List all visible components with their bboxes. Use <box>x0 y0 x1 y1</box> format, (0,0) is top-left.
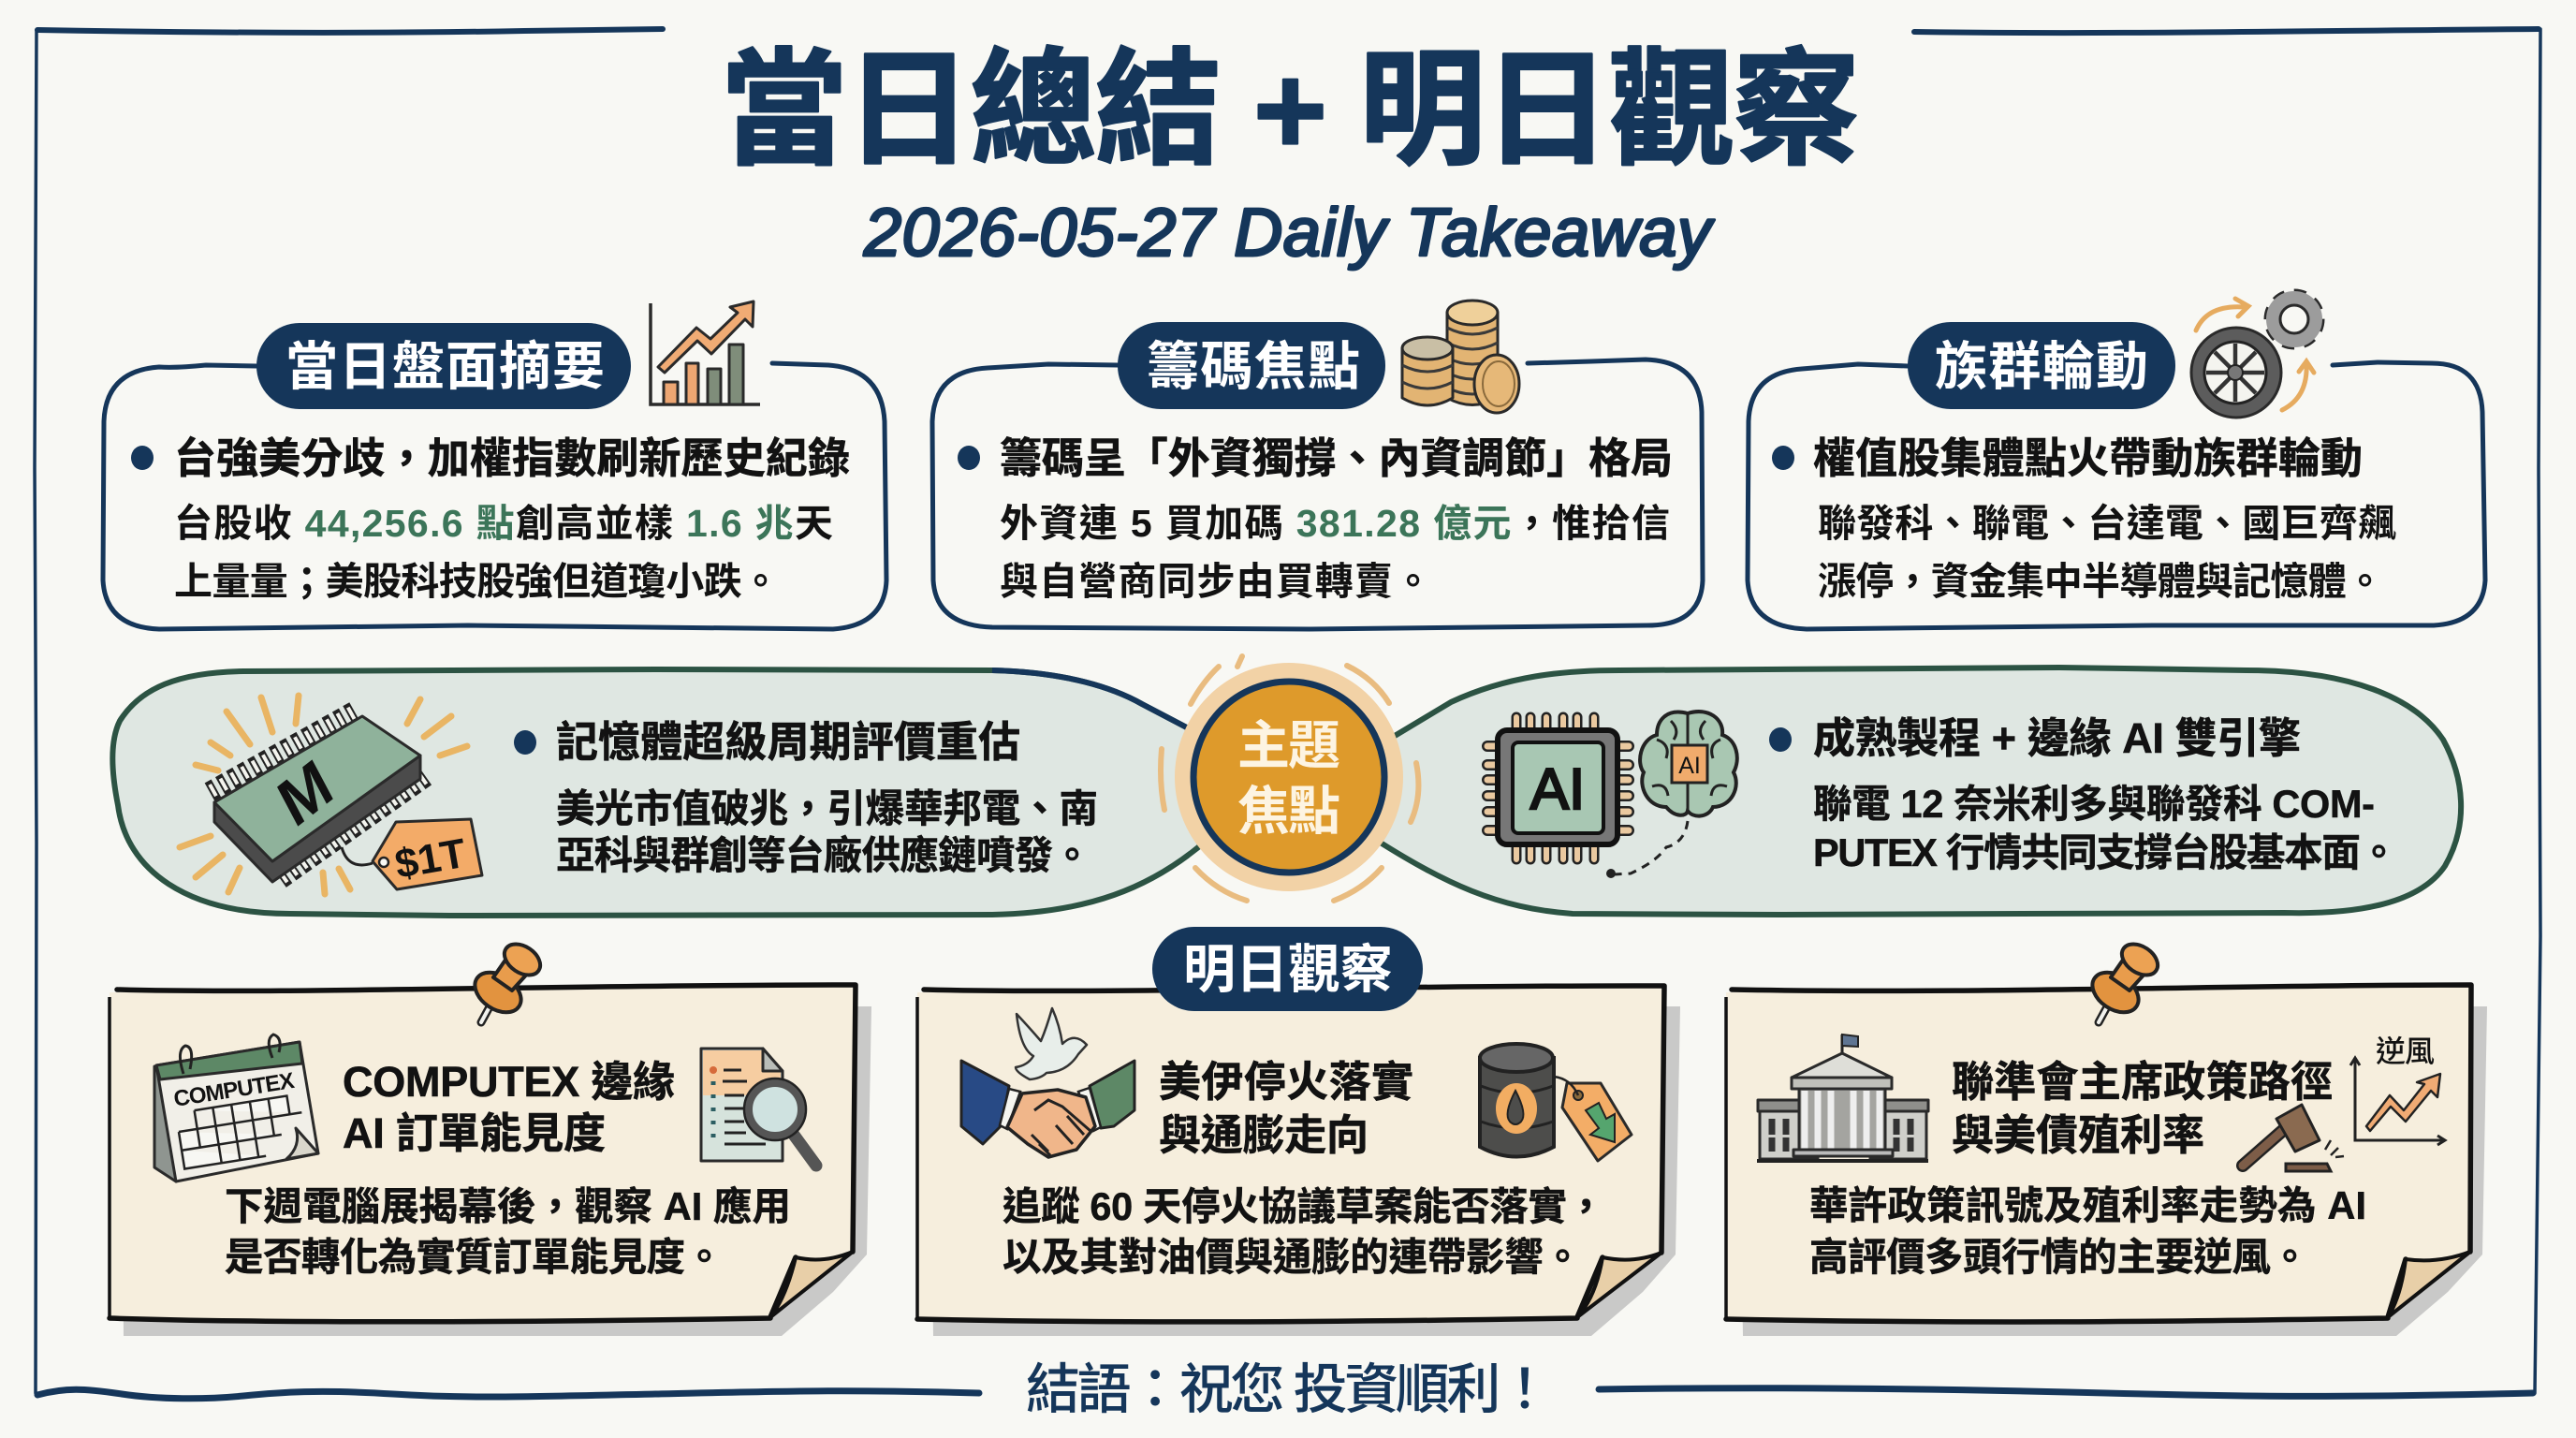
icon: computex calendar: COMPUTEX <box>172 1068 296 1112</box>
note heading <box>343 1058 675 1157</box>
note body <box>225 1184 791 1279</box>
icon: push pin <box>468 938 546 1022</box>
chips body text: 外資連 5 買加碼 381.28 億元，惟拾信 <box>1000 502 1670 545</box>
sector body text: 漲停，資金集中半導體與記憶體。 <box>1818 560 2384 603</box>
chips heading text: 籌碼呈「外資獨撐、內資調節」格局 <box>1000 434 1673 482</box>
heading pill: 籌碼焦點 <box>1147 337 1360 396</box>
icon: dove over handshake <box>961 1008 1134 1157</box>
heading pill <box>1908 322 2175 409</box>
bullet dot <box>514 730 536 755</box>
note body <box>1003 1184 1605 1279</box>
icon: memory chip with price tag: $1T <box>391 830 470 888</box>
memory body text: 亞科與群創等台廠供應鏈噴發。 <box>556 833 1091 877</box>
chips body text: 與自營商同步由買轉賣。 <box>1000 560 1432 603</box>
icon: coin stacks <box>1402 301 1519 413</box>
icon: AI chip <box>1487 717 1629 859</box>
chips body text <box>1000 502 1670 603</box>
icon: AI chip: AI <box>1530 757 1585 822</box>
panel: dual engine band <box>1368 668 2461 915</box>
tomorrow watch pill <box>1152 927 1423 1011</box>
heading pill <box>1118 322 1385 409</box>
note heading: 與通膨走向 <box>1159 1111 1368 1159</box>
dual engine body text: PUTEX 行情共同支撐台股基本面。 <box>1813 830 2398 874</box>
note heading <box>1952 1058 2333 1159</box>
note heading: 美伊停火落實 <box>1159 1058 1413 1106</box>
note heading: 聯準會主席政策路徑 <box>1952 1058 2333 1106</box>
summary heading text: 台強美分歧，加權指數刷新歷史紀錄 <box>174 434 850 482</box>
icon: memory chip with price tag <box>180 696 482 894</box>
panel: sector rotation <box>1748 298 2485 629</box>
note body: 追蹤 60 天停火協議草案能否落實， <box>1003 1184 1605 1228</box>
note: ceasefire <box>917 927 1680 1336</box>
memory body text: 美光市值破兆，引爆華邦電、南 <box>556 786 1098 830</box>
summary body text <box>174 502 833 603</box>
central badge: theme focus: 焦點 <box>1237 782 1340 841</box>
icon: wheel and gear with arrows <box>2191 298 2316 418</box>
note heading: 與美債殖利率 <box>1952 1111 2204 1159</box>
icon: computex calendar <box>154 1034 318 1181</box>
dual engine body text <box>1813 782 2398 874</box>
note body: 是否轉化為實質訂單能見度。 <box>225 1235 724 1279</box>
sector body text <box>1818 502 2396 603</box>
note heading <box>1159 1058 1413 1159</box>
subtitle: 2026-05-27 Daily Takeaway <box>863 196 1715 271</box>
icon: memory chip with price tag: M <box>267 744 343 842</box>
heading pill <box>256 323 631 409</box>
bullet dot <box>958 446 980 470</box>
note body: 高評價多頭行情的主要逆風。 <box>1809 1235 2309 1279</box>
central badge: theme focus: 主題 <box>1237 716 1340 775</box>
heading pill: 族群輪動 <box>1935 337 2148 396</box>
icon: brain with AI: AI <box>1678 753 1701 779</box>
icon: rising bar chart <box>651 301 760 404</box>
closing message: 結語：祝您 投資順利！ <box>1026 1359 1552 1420</box>
title: 當日總結 + 明日觀察 <box>721 39 1860 181</box>
icon: federal reserve building <box>1757 1034 1928 1161</box>
bullet dot <box>131 446 154 470</box>
dual engine body text: 聯電 12 奈米利多與聯發科 COM- <box>1813 782 2375 826</box>
note body: 下週電腦展揭幕後，觀察 AI 應用 <box>225 1184 791 1228</box>
icon: brain with AI <box>1606 712 1737 878</box>
memory body text <box>556 786 1098 877</box>
bullet dot <box>1772 446 1794 470</box>
summary body text: 台股收 44,256.6 點創高並樣 1.6 兆天 <box>174 502 833 545</box>
icon: document with magnifier <box>701 1049 816 1166</box>
tomorrow watch pill: 明日觀察 <box>1183 940 1393 999</box>
note heading: AI 訂單能見度 <box>343 1109 606 1157</box>
icon: headwind chart: 逆風 <box>2376 1034 2435 1068</box>
summary body text: 上量量；美股科技股強但道瓊小跌。 <box>174 560 780 603</box>
dual engine heading text: 成熟製程 + 邊緣 AI 雙引擎 <box>1813 714 2301 762</box>
sector heading text: 權值股集體點火帶動族群輪動 <box>1813 434 2363 482</box>
bullet dot <box>1769 727 1792 752</box>
icon: gavel <box>2243 1105 2344 1171</box>
icon: push pin <box>2086 938 2163 1022</box>
note body <box>1809 1183 2366 1279</box>
panel: chips focus <box>932 301 1703 629</box>
panel: memory band <box>112 669 1209 916</box>
sector body text: 聯發科、聯電、台達電、國巨齊飆 <box>1818 502 2396 545</box>
note: fed policy <box>1726 938 2487 1336</box>
panel: market summary <box>103 301 886 629</box>
memory heading text: 記憶體超級周期評價重估 <box>556 718 1020 766</box>
note body: 華許政策訊號及殖利率走勢為 AI <box>1809 1183 2366 1227</box>
icon: headwind chart <box>2350 1034 2445 1145</box>
note body: 以及其對油價與通膨的連帶影響。 <box>1003 1235 1582 1279</box>
note heading: COMPUTEX 邊緣 <box>343 1058 675 1106</box>
central badge: theme focus <box>1161 656 1418 901</box>
icon: oil barrel with down tag <box>1480 1044 1632 1161</box>
note: computex <box>110 938 871 1336</box>
heading pill: 當日盤面摘要 <box>285 337 605 396</box>
